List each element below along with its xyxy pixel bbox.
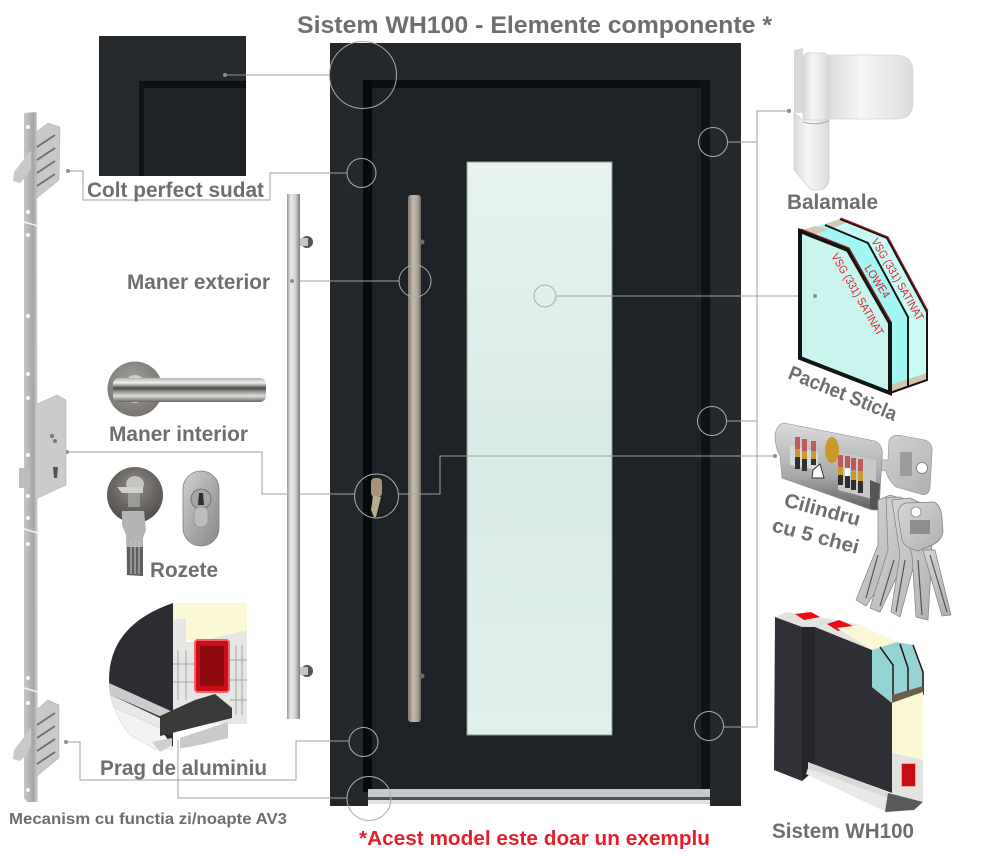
door sash xyxy=(363,80,710,792)
back pane xyxy=(825,219,927,386)
label: Prag de aluminiu: Prag de aluminiu xyxy=(100,757,267,780)
callout circles on door xyxy=(330,42,728,820)
cream insulation xyxy=(173,602,247,642)
spacer bars xyxy=(800,219,848,235)
label: Colt perfect sudat: Colt perfect sudat xyxy=(87,179,264,202)
label: Rozete: Rozete xyxy=(150,559,218,582)
door frame xyxy=(330,43,741,806)
door handle xyxy=(408,195,424,722)
note: *Acest model este doar un exemplu xyxy=(359,827,710,850)
label: Maner exterior: Maner exterior xyxy=(127,271,270,294)
aluminium threshold xyxy=(109,683,171,716)
threshold rails xyxy=(808,762,892,800)
oval rosette xyxy=(183,471,219,546)
callout lines xyxy=(66,75,815,798)
door xyxy=(330,43,741,806)
panel: welded corner detail xyxy=(99,36,246,176)
cream side xyxy=(892,692,923,760)
middle cavity xyxy=(808,224,908,393)
frame face xyxy=(774,617,802,781)
pane label 1: VSG (331) SATINAT xyxy=(828,252,885,338)
label: Cilindru cu 5 chei: cu 5 chei xyxy=(770,515,861,559)
hinge xyxy=(787,48,913,190)
threshold xyxy=(368,789,710,806)
top profile xyxy=(775,612,872,650)
white profile xyxy=(173,618,247,724)
profile end xyxy=(892,753,923,808)
door profile section xyxy=(774,612,924,813)
glass panel xyxy=(467,162,612,735)
top hook plate xyxy=(13,123,60,198)
interior lever handle xyxy=(108,362,266,416)
cylinder core xyxy=(825,437,839,463)
bottom hook plate xyxy=(13,700,59,777)
pane label 3: VSG (331) SATINAT xyxy=(868,236,925,323)
key xyxy=(868,435,932,495)
sash face xyxy=(815,627,892,793)
label: Sistem WH100: Sistem WH100 xyxy=(772,820,914,843)
title: Sistem WH100 - Elemente componente * xyxy=(297,12,773,39)
label: Cilindru cu 5 chei: Cilindru xyxy=(782,490,863,531)
red reinforcement xyxy=(195,640,229,692)
label: Maner interior: Maner interior xyxy=(109,423,248,446)
front pane xyxy=(800,231,890,393)
pins xyxy=(795,437,863,493)
central lock box xyxy=(19,395,66,498)
callout dots xyxy=(64,109,791,744)
threshold cross-section xyxy=(105,600,247,752)
pane label 2: LOWE4 xyxy=(861,263,892,301)
cream top xyxy=(837,625,897,650)
cylinder body xyxy=(775,423,882,510)
lock strip xyxy=(24,112,38,802)
dark panel xyxy=(105,600,173,750)
label: Balamale: Balamale xyxy=(787,191,878,214)
pane edges xyxy=(800,231,890,393)
exterior bar handle xyxy=(287,194,313,719)
bunch of keys xyxy=(856,495,951,620)
strip holes xyxy=(26,125,30,792)
lock cylinder with key xyxy=(775,423,932,510)
label: Mecanism: Mecanism cu functia zi/noapte AV3 xyxy=(9,811,287,828)
label: Cilindru cu 5 chei xyxy=(770,490,863,559)
rosette with keys xyxy=(107,467,163,576)
label: Pachet Sticla: Pachet Sticla xyxy=(785,362,901,426)
multipoint lock mechanism xyxy=(13,112,66,802)
lock on door xyxy=(371,478,382,517)
glass package xyxy=(800,218,928,393)
triple glazing xyxy=(872,642,924,703)
